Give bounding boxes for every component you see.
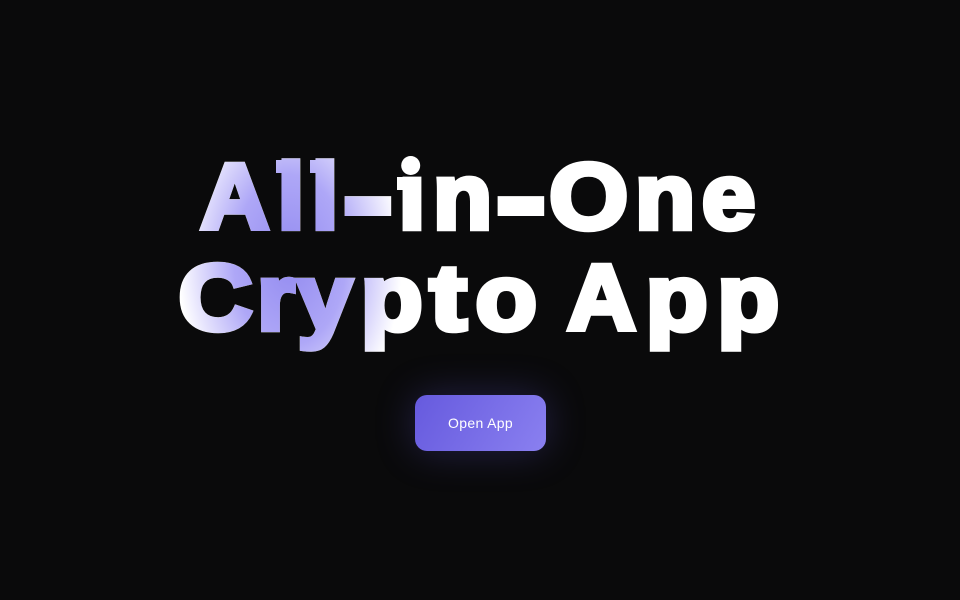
headline line 2: p xyxy=(361,245,423,350)
headline line 1: - xyxy=(496,134,546,259)
headline line 2 xyxy=(178,245,779,350)
headline line 2: A xyxy=(567,245,636,349)
headline line 1: n xyxy=(635,145,695,249)
headline line 1 xyxy=(200,134,755,259)
headline line 2: C xyxy=(178,246,252,349)
button: Open App xyxy=(415,395,546,451)
headline line 1: n xyxy=(433,145,492,249)
headline line 2: o xyxy=(476,245,537,350)
headline line 2: t xyxy=(430,245,467,350)
button: Open App: Open App xyxy=(448,415,513,431)
headline line 1: e xyxy=(702,146,755,249)
headline line 2: r xyxy=(257,247,295,350)
headline purple gradient tint xyxy=(170,140,430,370)
headline line 1: l xyxy=(312,146,338,249)
headline line 1: - xyxy=(343,134,393,259)
headline line 2: y xyxy=(298,247,352,350)
headline line 1: A xyxy=(200,144,269,248)
headline line 1: l xyxy=(278,146,304,249)
headline line 2: p xyxy=(646,245,708,350)
headline line 2: p xyxy=(717,245,779,350)
headline line 1: ı xyxy=(399,146,425,249)
headline line 1: O xyxy=(549,144,628,249)
